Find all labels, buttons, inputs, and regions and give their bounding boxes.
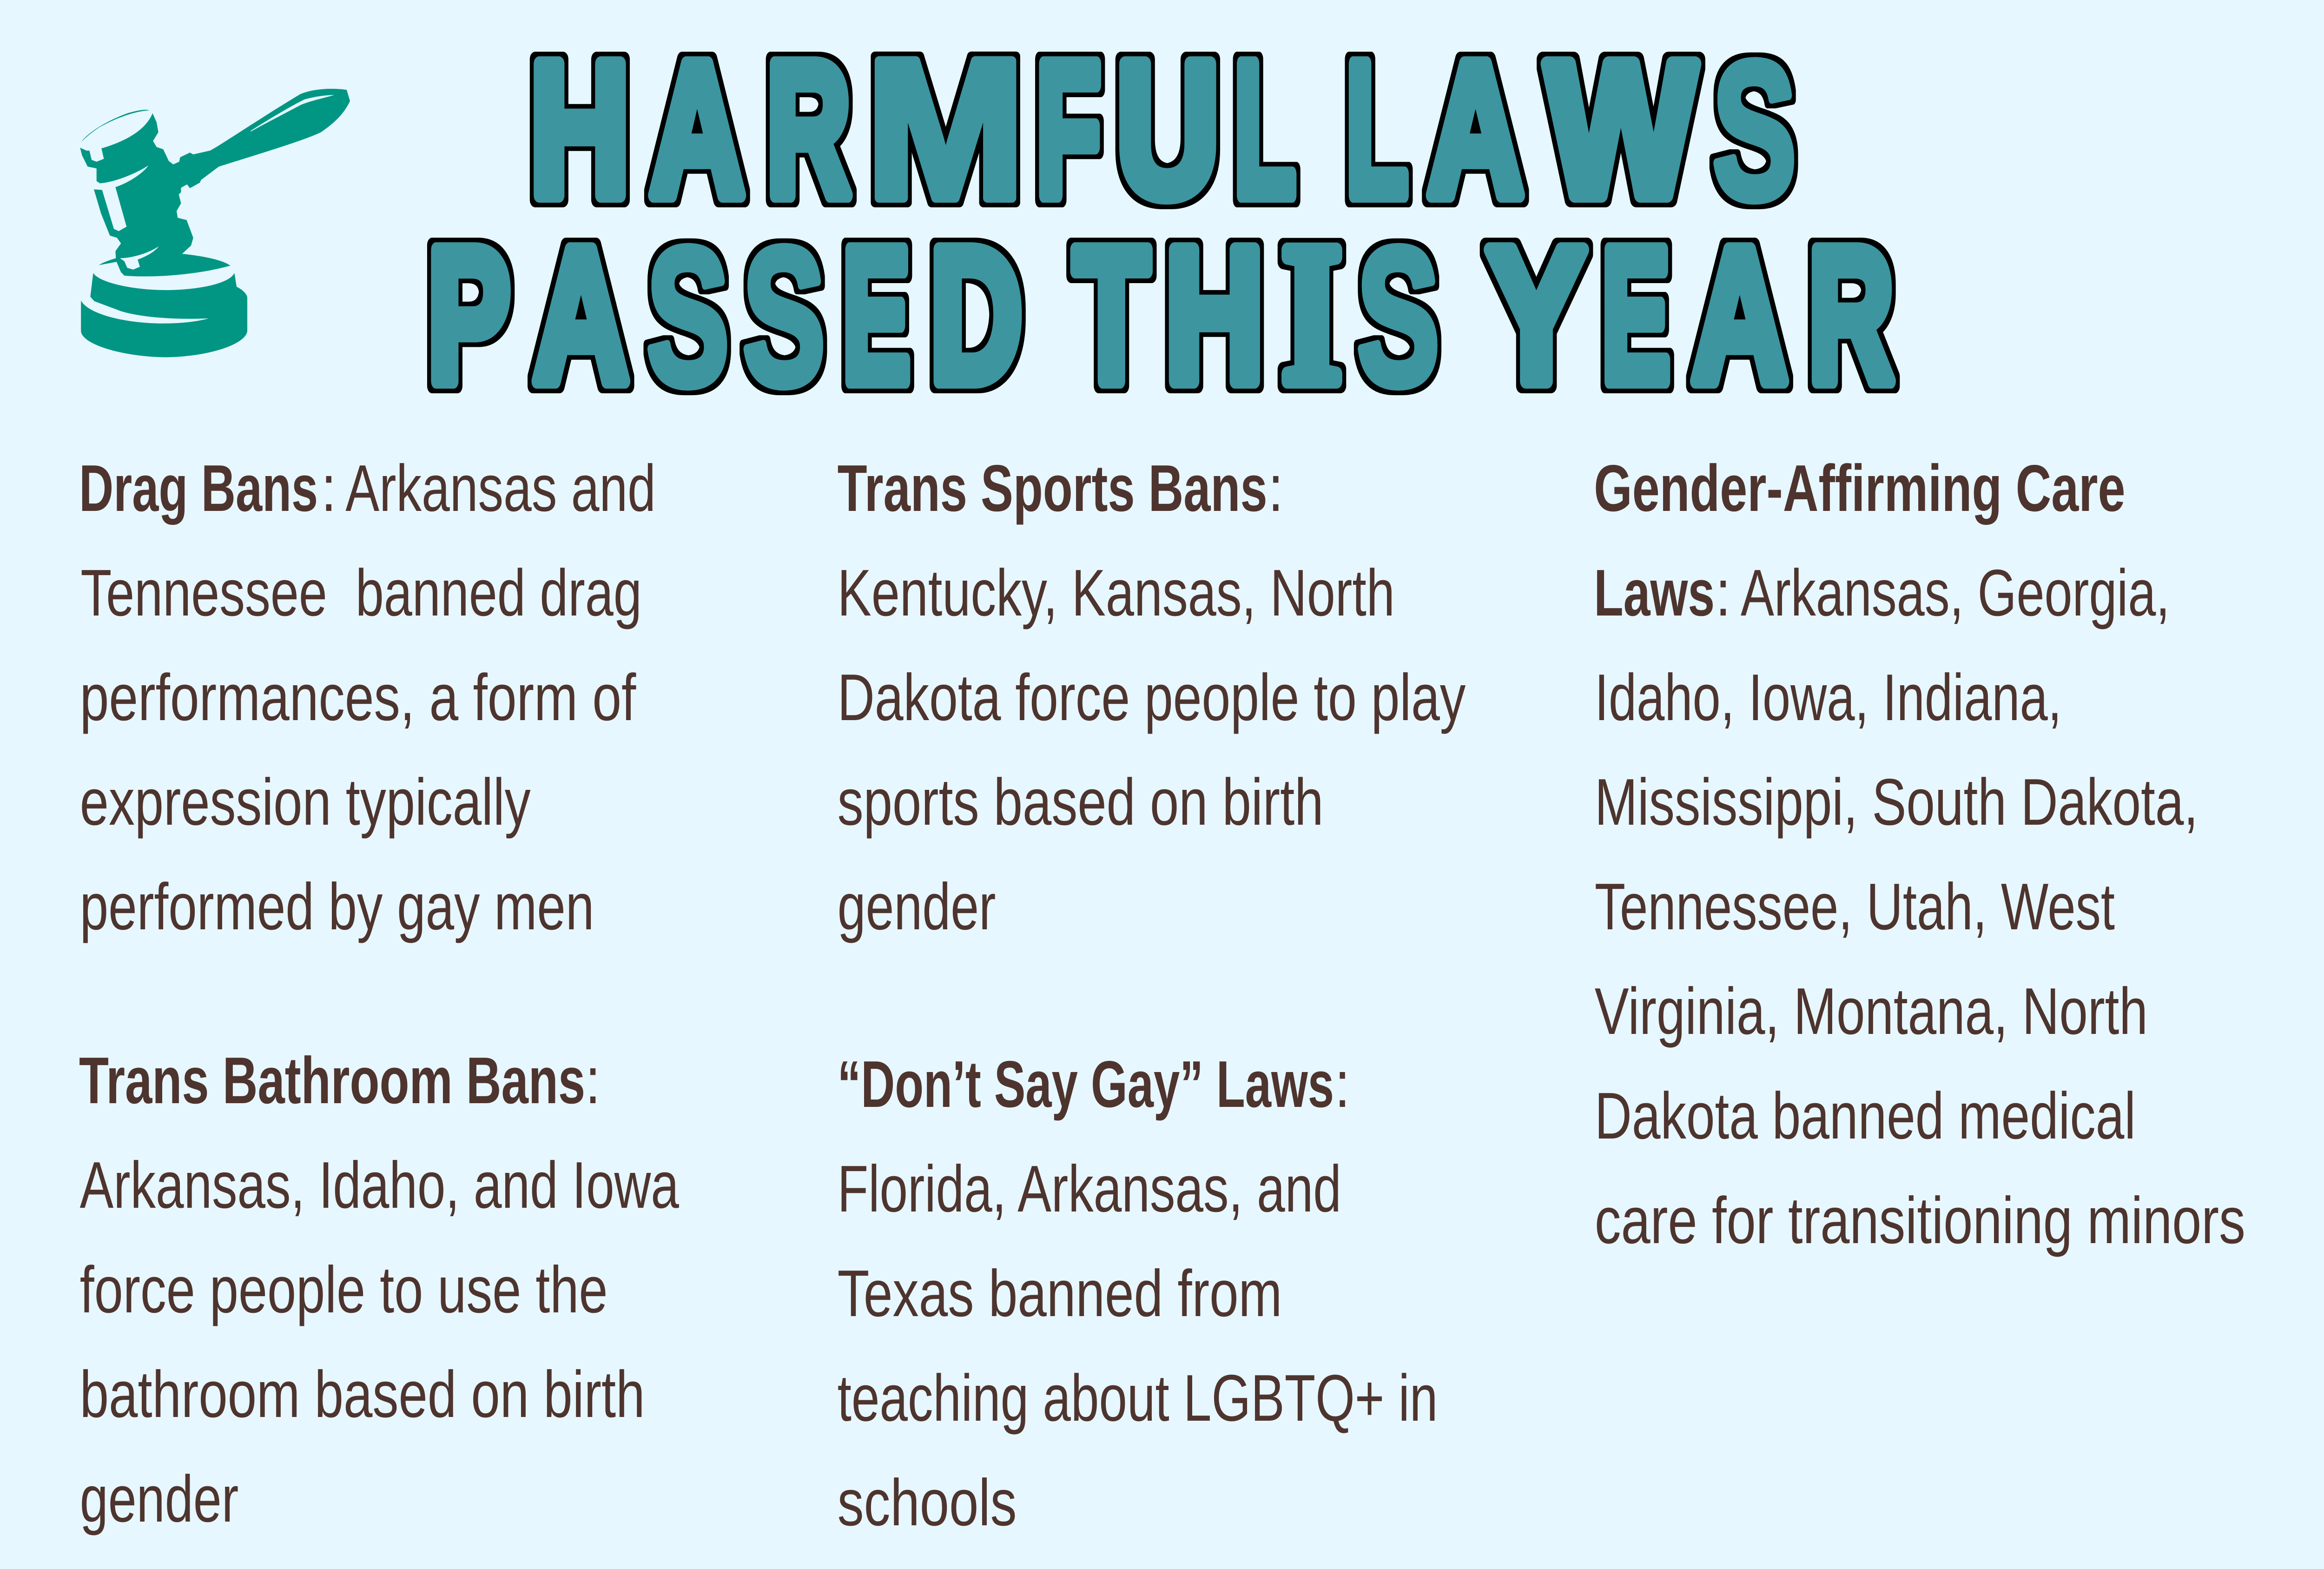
text block: gender-affirming care laws: Arkansas, Georgia, — [1741, 556, 2170, 629]
text block: drag bans: Arkansas and — [345, 451, 656, 525]
title line 1: R — [766, 23, 851, 236]
title line 2: S — [1357, 207, 1439, 425]
text block: gender-affirming care laws: care for transitioning minors — [1595, 1184, 2245, 1257]
icon: gavel — [80, 89, 350, 357]
text block: trans sports bans: Dakota force people to play — [838, 661, 1466, 734]
text block: trans bathroom bans: gender — [80, 1462, 238, 1536]
title line 2: A — [1692, 209, 1788, 422]
title line 2: T — [1074, 209, 1149, 422]
text block: trans sports bans: Kentucky, Kansas, North — [838, 556, 1395, 629]
text block: gender-affirming care laws: Dakota banned medical — [1595, 1079, 2136, 1152]
title — [428, 18, 1894, 425]
title line 2: E — [842, 209, 910, 422]
title line 1: H — [530, 23, 630, 236]
title line 2: I — [1282, 202, 1342, 424]
text block: don't say gay laws: : — [1335, 1047, 1350, 1121]
text block: drag bans — [79, 451, 656, 943]
title line 2: Y — [1487, 209, 1586, 422]
text block: trans sports bans: sports based on birth — [838, 765, 1324, 839]
title line 1: A — [650, 23, 745, 236]
title line 1: F — [1036, 23, 1101, 236]
title line 1: L — [1234, 23, 1296, 236]
text block: drag bans: performed by gay men — [80, 870, 594, 943]
text block: trans bathroom bans: bathroom based on birth — [80, 1357, 645, 1431]
text block: gender-affirming care laws: Laws — [1594, 556, 1715, 629]
text block: gender-affirming care laws: Mississippi, South Dakota, — [1595, 765, 2198, 839]
text block: don't say gay laws: teaching about LGBTQ+ in — [838, 1361, 1438, 1435]
title line 1: U — [1116, 23, 1219, 236]
text block: drag bans: performances, a form of — [80, 661, 636, 734]
title line 1: L — [1346, 23, 1408, 236]
text block: trans bathroom bans: Trans Bathroom Bans — [79, 1044, 585, 1117]
text block: trans sports bans — [838, 451, 1466, 943]
text block: don't say gay laws: schools — [838, 1466, 1017, 1539]
title line 2: S — [647, 207, 729, 425]
text block: drag bans: Tennessee banned drag — [80, 556, 642, 629]
text block: gender-affirming care laws: : — [1716, 556, 1731, 629]
text block: drag bans: expression typically — [80, 765, 531, 839]
title line 2: A — [534, 209, 629, 422]
text block: trans bathroom bans: Arkansas, Idaho, and Iowa — [80, 1148, 679, 1222]
title line 1: W — [1547, 23, 1697, 236]
text block: gender-affirming care laws: Gender-Affirming Care — [1594, 451, 2125, 525]
text block: don't say gay laws — [838, 1047, 1438, 1539]
text block: don't say gay laws: “Don’t Say Gay” Laws — [838, 1047, 1334, 1121]
text block: gender-affirming care laws — [1594, 451, 2245, 1257]
text block: trans sports bans: Trans Sports Bans — [838, 451, 1268, 525]
text block: trans sports bans: : — [1268, 451, 1283, 525]
text block: trans bathroom bans: : — [585, 1044, 601, 1117]
text block: drag bans: : — [321, 451, 337, 525]
text block: gender-affirming care laws: Virginia, Montana, North — [1595, 974, 2148, 1048]
title line 1: M — [866, 18, 1024, 240]
text block: gender-affirming care laws: Tennessee, Utah, West — [1595, 870, 2115, 943]
text block: trans bathroom bans: force people to use the — [80, 1253, 608, 1326]
title line 2: P — [428, 209, 510, 422]
text block: don't say gay laws: Texas banned from — [838, 1257, 1282, 1330]
title line 2: S — [743, 207, 825, 425]
text block: trans bathroom bans — [79, 1044, 679, 1536]
text block: don't say gay laws: Florida, Arkansas, and — [838, 1152, 1341, 1225]
title line 2: D — [930, 209, 1022, 422]
title line 2: H — [1165, 209, 1264, 422]
title line 1: A — [1428, 23, 1524, 236]
title line 1: S — [1713, 21, 1796, 239]
title line 2: R — [1809, 209, 1894, 422]
text block: drag bans: Drag Bans — [79, 451, 318, 525]
title line 2: E — [1602, 209, 1670, 422]
text block: trans sports bans: gender — [838, 870, 996, 943]
text block: gender-affirming care laws: Idaho, Iowa, Indiana, — [1595, 661, 2062, 734]
